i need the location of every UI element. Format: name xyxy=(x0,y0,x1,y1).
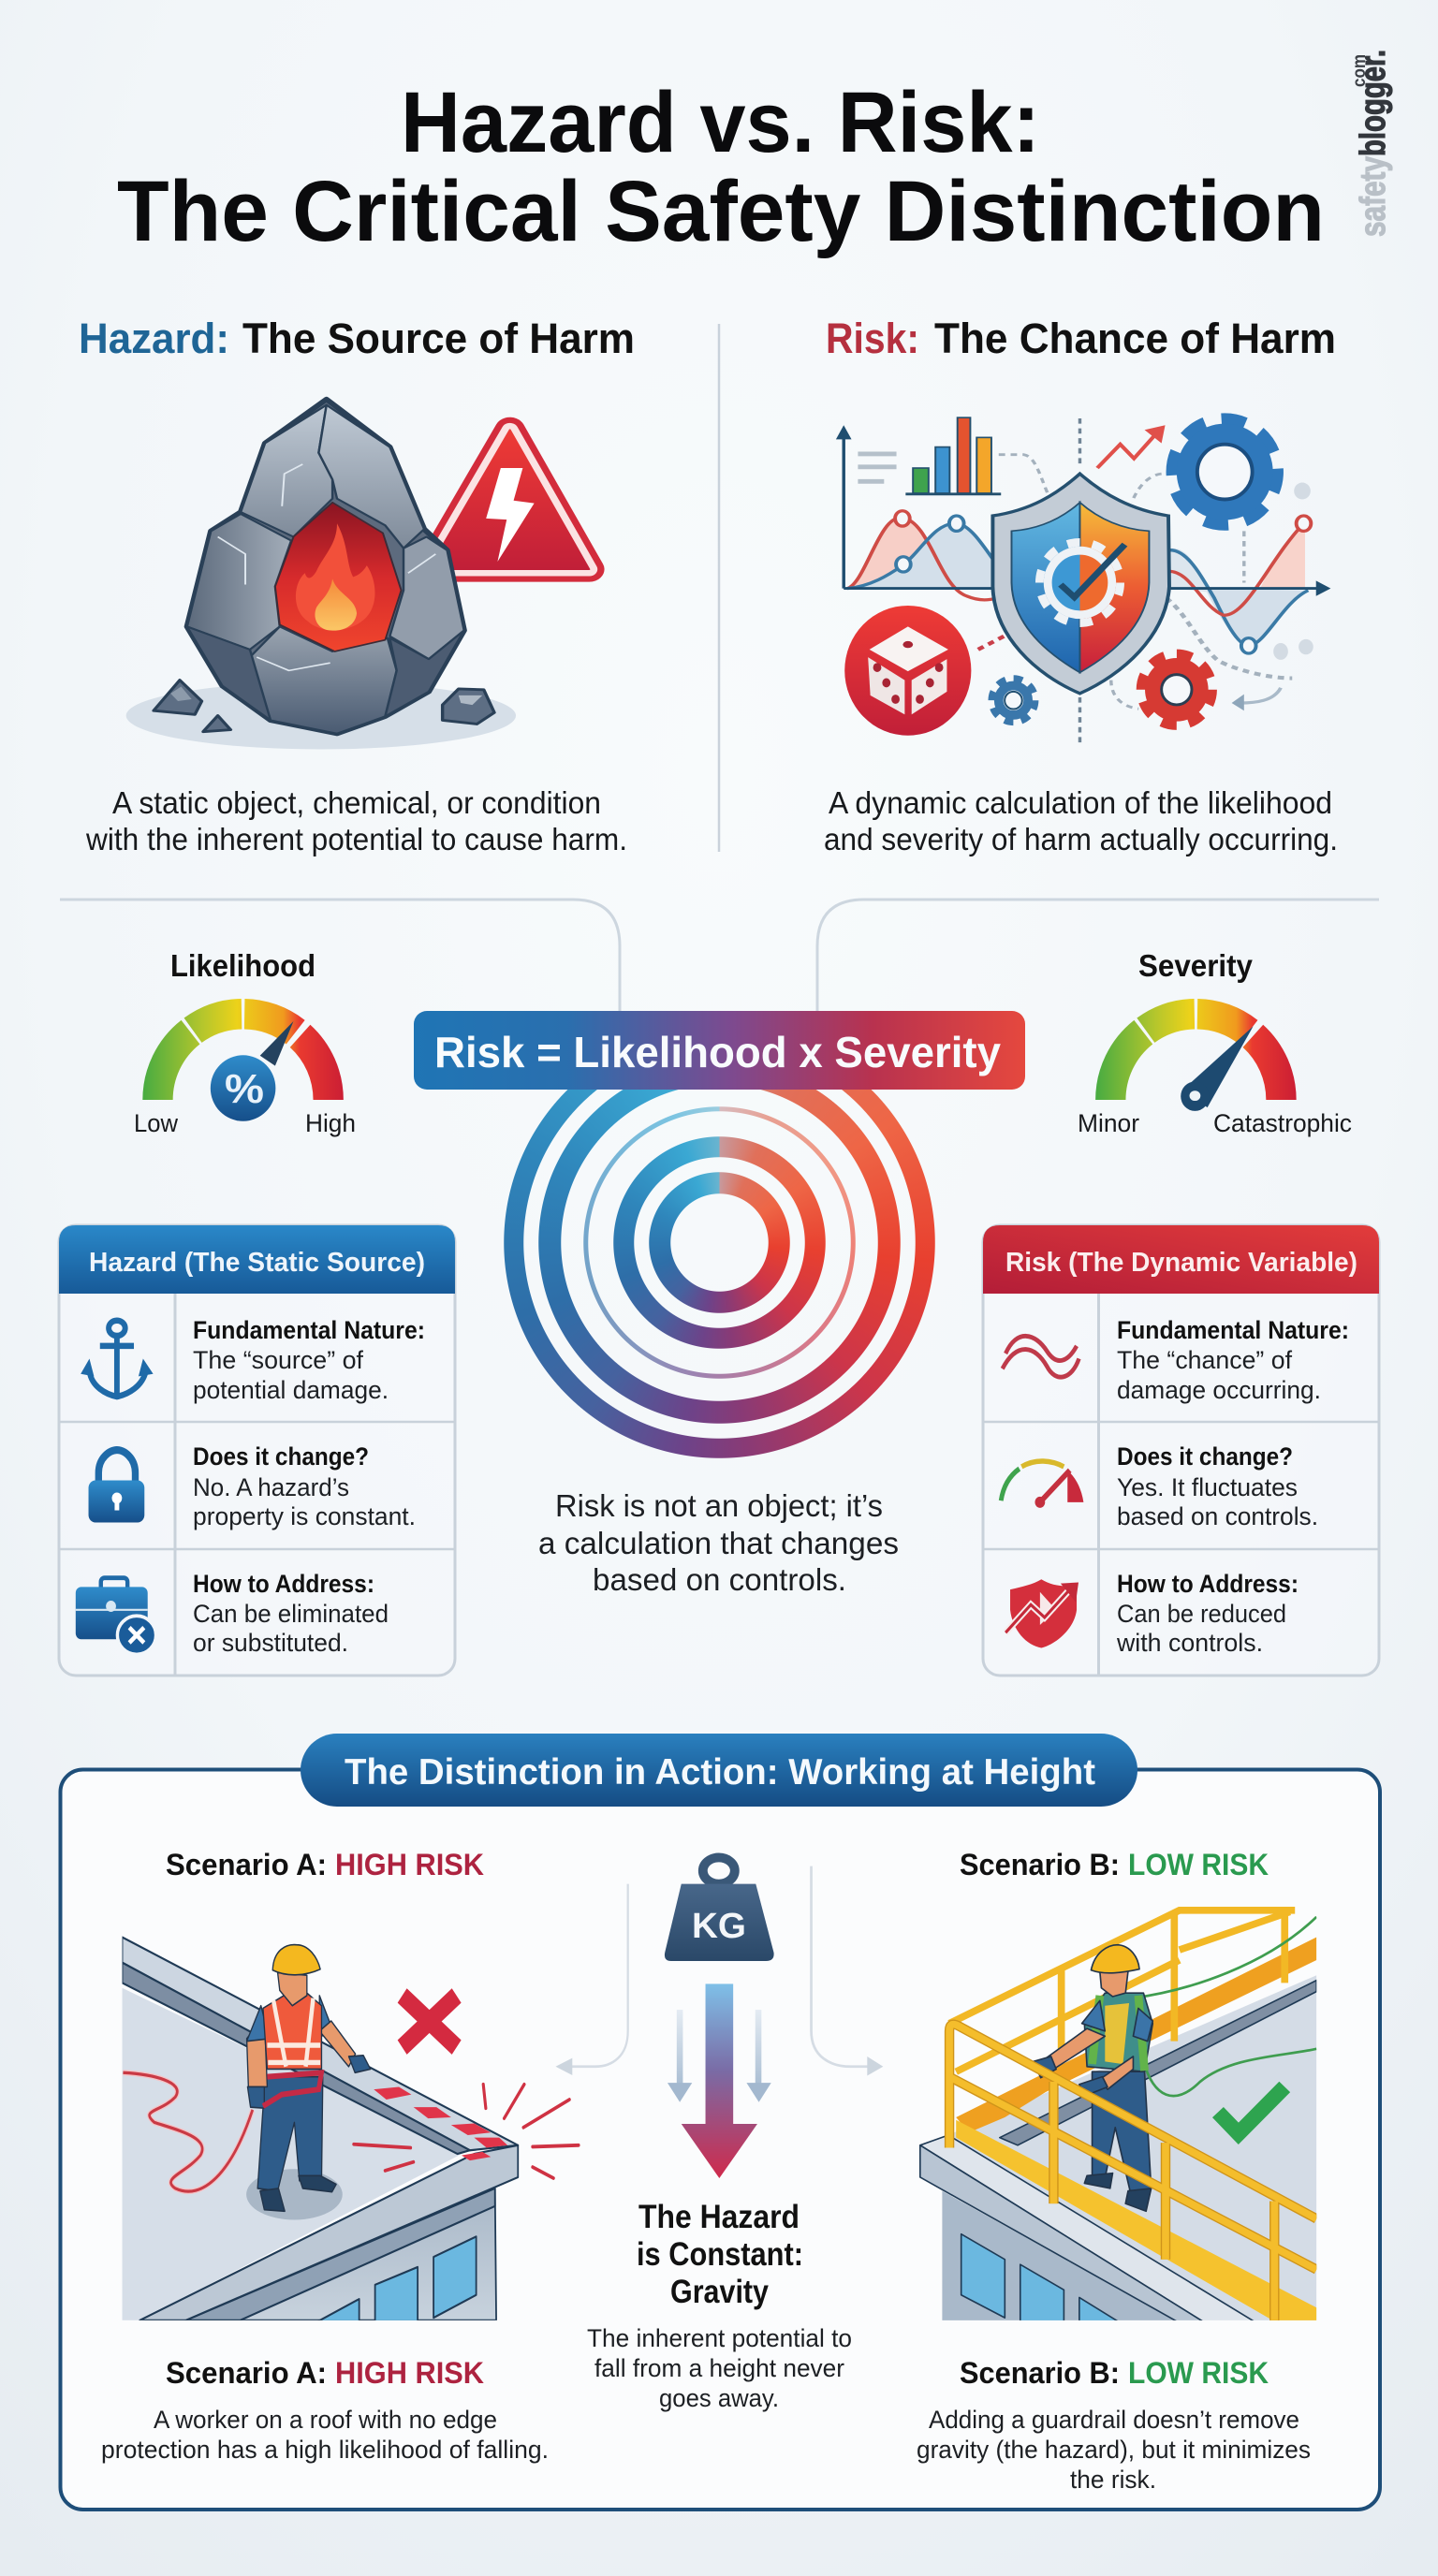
warning sparks xyxy=(354,2085,579,2178)
row text: fundamental nature xyxy=(1117,1316,1349,1404)
row text: does it change: Yes. It fluctuates xyxy=(1117,1473,1298,1501)
section pill heading: The Distinction in Action: Working at Height xyxy=(345,1752,1095,1793)
text: center explanation: a calculation that changes xyxy=(538,1526,899,1560)
scenario B heading xyxy=(960,1848,1269,1881)
severity gauge: Severity xyxy=(1138,948,1254,983)
text: hazard description: with the inherent potential to cause harm. xyxy=(85,822,627,856)
warning triangle xyxy=(429,430,589,569)
row text: how to address: How to Address: xyxy=(1117,1570,1299,1598)
scenario B heading: Scenario B: xyxy=(960,1848,1120,1881)
icon: small blue gear xyxy=(991,679,1035,723)
row text: does it change xyxy=(1117,1442,1318,1530)
illustration: worker on unprotected roof xyxy=(123,1884,628,2323)
pebbles xyxy=(154,681,494,732)
vest stripes xyxy=(267,1998,320,2067)
severity gauge: Minor xyxy=(1078,1109,1139,1137)
chart areas and curves xyxy=(847,518,1308,646)
hazard stripes on edge xyxy=(374,2086,507,2160)
formula banner: Risk = Likelihood x Severity xyxy=(434,1028,1001,1076)
roof and building xyxy=(123,1938,518,2323)
heading: hazard: Hazard: xyxy=(79,315,229,362)
front guardrail xyxy=(949,2025,1316,2323)
roof and building xyxy=(920,1975,1316,2323)
icon: shield xyxy=(992,474,1169,694)
fire core xyxy=(275,503,402,651)
text: center explanation: based on controls. xyxy=(593,1562,846,1597)
connector: left bracket xyxy=(60,900,620,1016)
icon: blue gear xyxy=(1173,420,1276,523)
row text: fundamental nature: Fundamental Nature: xyxy=(193,1316,425,1344)
row text: how to address xyxy=(193,1570,389,1657)
scenario B caption: the risk. xyxy=(1070,2466,1156,2494)
row text: fundamental nature: The “chance” of xyxy=(1117,1346,1292,1374)
central hazard column: goes away. xyxy=(659,2384,779,2412)
brand watermark: safety xyxy=(1354,156,1393,237)
red cross xyxy=(403,1996,457,2047)
icon: risk shield, charts, dice and gears xyxy=(836,417,1330,743)
row text: how to address: Can be reduced xyxy=(1117,1600,1286,1628)
row text: fundamental nature: The “source” of xyxy=(193,1346,363,1374)
likelihood gauge: High xyxy=(305,1109,356,1137)
icon: kg weight xyxy=(665,1857,774,1961)
worker xyxy=(247,1945,371,2211)
text: risk description xyxy=(824,785,1338,856)
formula banner xyxy=(414,1011,1025,1090)
row text: does it change: Does it change? xyxy=(193,1442,369,1471)
icon: small gauge xyxy=(1001,1461,1083,1508)
rising red arrow xyxy=(1097,425,1166,468)
scenario B heading: LOW RISK xyxy=(1128,1848,1269,1881)
scenario B caption: Adding a guardrail doesn’t remove xyxy=(929,2406,1299,2434)
likelihood gauge: Likelihood xyxy=(170,948,315,983)
panel: risk table xyxy=(983,1225,1379,1676)
central hazard column: fall from a height never xyxy=(594,2354,844,2382)
brand watermark xyxy=(1350,50,1393,237)
rock body xyxy=(187,400,464,734)
dashed connectors xyxy=(978,418,1292,743)
green check xyxy=(1218,2086,1284,2133)
scenario A caption: A worker on a roof with no edge xyxy=(154,2406,497,2434)
heading: risk: Risk: xyxy=(826,315,919,362)
scenario A caption: protection has a high likelihood of falling. xyxy=(101,2436,549,2464)
row text: how to address: Can be eliminated xyxy=(193,1600,389,1628)
scenario B caption: Scenario B: xyxy=(960,2356,1120,2390)
icon: padlock xyxy=(89,1450,144,1523)
icon: dice xyxy=(844,606,971,736)
section pill heading xyxy=(301,1734,1137,1807)
background dots xyxy=(1273,483,1313,660)
row text: fundamental nature: Fundamental Nature: xyxy=(1117,1316,1349,1344)
scenario B caption xyxy=(917,2356,1311,2494)
text: hazard description: A static object, chemical, or condition xyxy=(112,785,601,820)
central hazard column: The Hazard xyxy=(638,2199,800,2235)
likelihood gauge: % xyxy=(225,1066,264,1112)
bar chart xyxy=(905,417,1001,494)
likelihood gauge: Low xyxy=(134,1109,178,1137)
heading: hazard: The Source of Harm xyxy=(242,315,635,362)
connector: right bracket xyxy=(817,900,1379,1016)
scenario A heading: HIGH RISK xyxy=(335,1848,484,1881)
heading: hazard xyxy=(79,315,635,362)
back guardrail xyxy=(949,1910,1316,2132)
small gravity arrows xyxy=(668,2010,771,2102)
panel: distinction in action xyxy=(60,1734,1380,2510)
row text: does it change: based on controls. xyxy=(1117,1502,1318,1530)
heading: risk: The Chance of Harm xyxy=(934,315,1336,362)
illustration: worker behind guardrail xyxy=(920,1910,1316,2323)
big gravity arrow xyxy=(682,1983,757,2178)
row text: how to address: How to Address: xyxy=(193,1570,374,1598)
title xyxy=(117,75,1325,259)
arrow: hazard to scenario B xyxy=(812,1866,883,2076)
row text: how to address: with controls. xyxy=(1116,1629,1263,1657)
curved return arrow xyxy=(1232,688,1281,710)
green lanyards xyxy=(1133,1917,1316,2096)
central hazard column: KG xyxy=(692,1907,746,1946)
row text: does it change: No. A hazard’s xyxy=(193,1473,349,1501)
brand watermark: blogger. xyxy=(1354,50,1393,156)
icon: anchor xyxy=(81,1321,154,1397)
central hazard column: The inherent potential to xyxy=(587,2324,852,2352)
table header xyxy=(59,1225,455,1294)
severity gauge: Catastrophic xyxy=(1213,1109,1352,1137)
central hazard column xyxy=(587,1857,883,2412)
scenario A caption: Scenario A: xyxy=(166,2356,327,2390)
title: The Critical Safety Distinction xyxy=(117,164,1325,259)
arrow: hazard to scenario A xyxy=(555,1884,628,2075)
icon: waves xyxy=(1003,1336,1078,1377)
concentric risk rings xyxy=(504,1090,935,1458)
icon: cracked rock with fire and warning sign xyxy=(126,400,589,749)
scenario A caption: HIGH RISK xyxy=(335,2356,484,2390)
table header: Risk (The Dynamic Variable) xyxy=(1005,1248,1357,1278)
text: center explanation xyxy=(538,1488,899,1597)
panel: hazard table xyxy=(59,1225,455,1676)
row text: fundamental nature xyxy=(193,1316,425,1404)
axes xyxy=(836,425,1330,596)
central hazard column: is Constant: xyxy=(637,2236,803,2273)
legend lines xyxy=(858,454,897,481)
table header xyxy=(983,1225,1379,1294)
icon: red gear xyxy=(1141,654,1212,725)
central hazard column: Gravity xyxy=(670,2274,769,2310)
likelihood gauge xyxy=(134,948,356,1137)
text: hazard description xyxy=(85,785,627,856)
harness xyxy=(263,2072,321,2106)
scenario B caption: gravity (the hazard), but it minimizes xyxy=(917,2436,1311,2464)
loose safety rope xyxy=(123,2072,253,2191)
scenario A heading xyxy=(166,1848,484,1881)
table header: Hazard (The Static Source) xyxy=(89,1248,425,1278)
icon: toolbox with cross xyxy=(76,1578,156,1654)
row text: how to address xyxy=(1116,1570,1299,1657)
text: risk description: A dynamic calculation of the likelihood xyxy=(829,785,1332,820)
row text: does it change: property is constant. xyxy=(193,1502,416,1530)
text: risk description: and severity of harm actually occurring. xyxy=(824,822,1338,856)
text: center explanation: Risk is not an object; it’s xyxy=(555,1488,883,1523)
title: Hazard vs. Risk: xyxy=(401,75,1040,170)
rock highlights xyxy=(218,464,435,670)
row text: how to address: or substituted. xyxy=(193,1629,348,1657)
scenario A heading: Scenario A: xyxy=(166,1848,327,1881)
worker xyxy=(1033,1945,1152,2211)
icon: shield with arrow xyxy=(1005,1579,1078,1647)
chart markers xyxy=(895,511,1311,653)
brand watermark: com xyxy=(1350,54,1370,87)
row text: does it change xyxy=(193,1442,416,1530)
row text: does it change: Does it change? xyxy=(1117,1442,1293,1471)
row text: fundamental nature: potential damage. xyxy=(193,1376,389,1404)
scenario B caption: LOW RISK xyxy=(1128,2356,1269,2390)
row text: fundamental nature: damage occurring. xyxy=(1117,1376,1321,1404)
severity gauge xyxy=(1078,948,1352,1137)
scenario A caption xyxy=(101,2356,549,2464)
